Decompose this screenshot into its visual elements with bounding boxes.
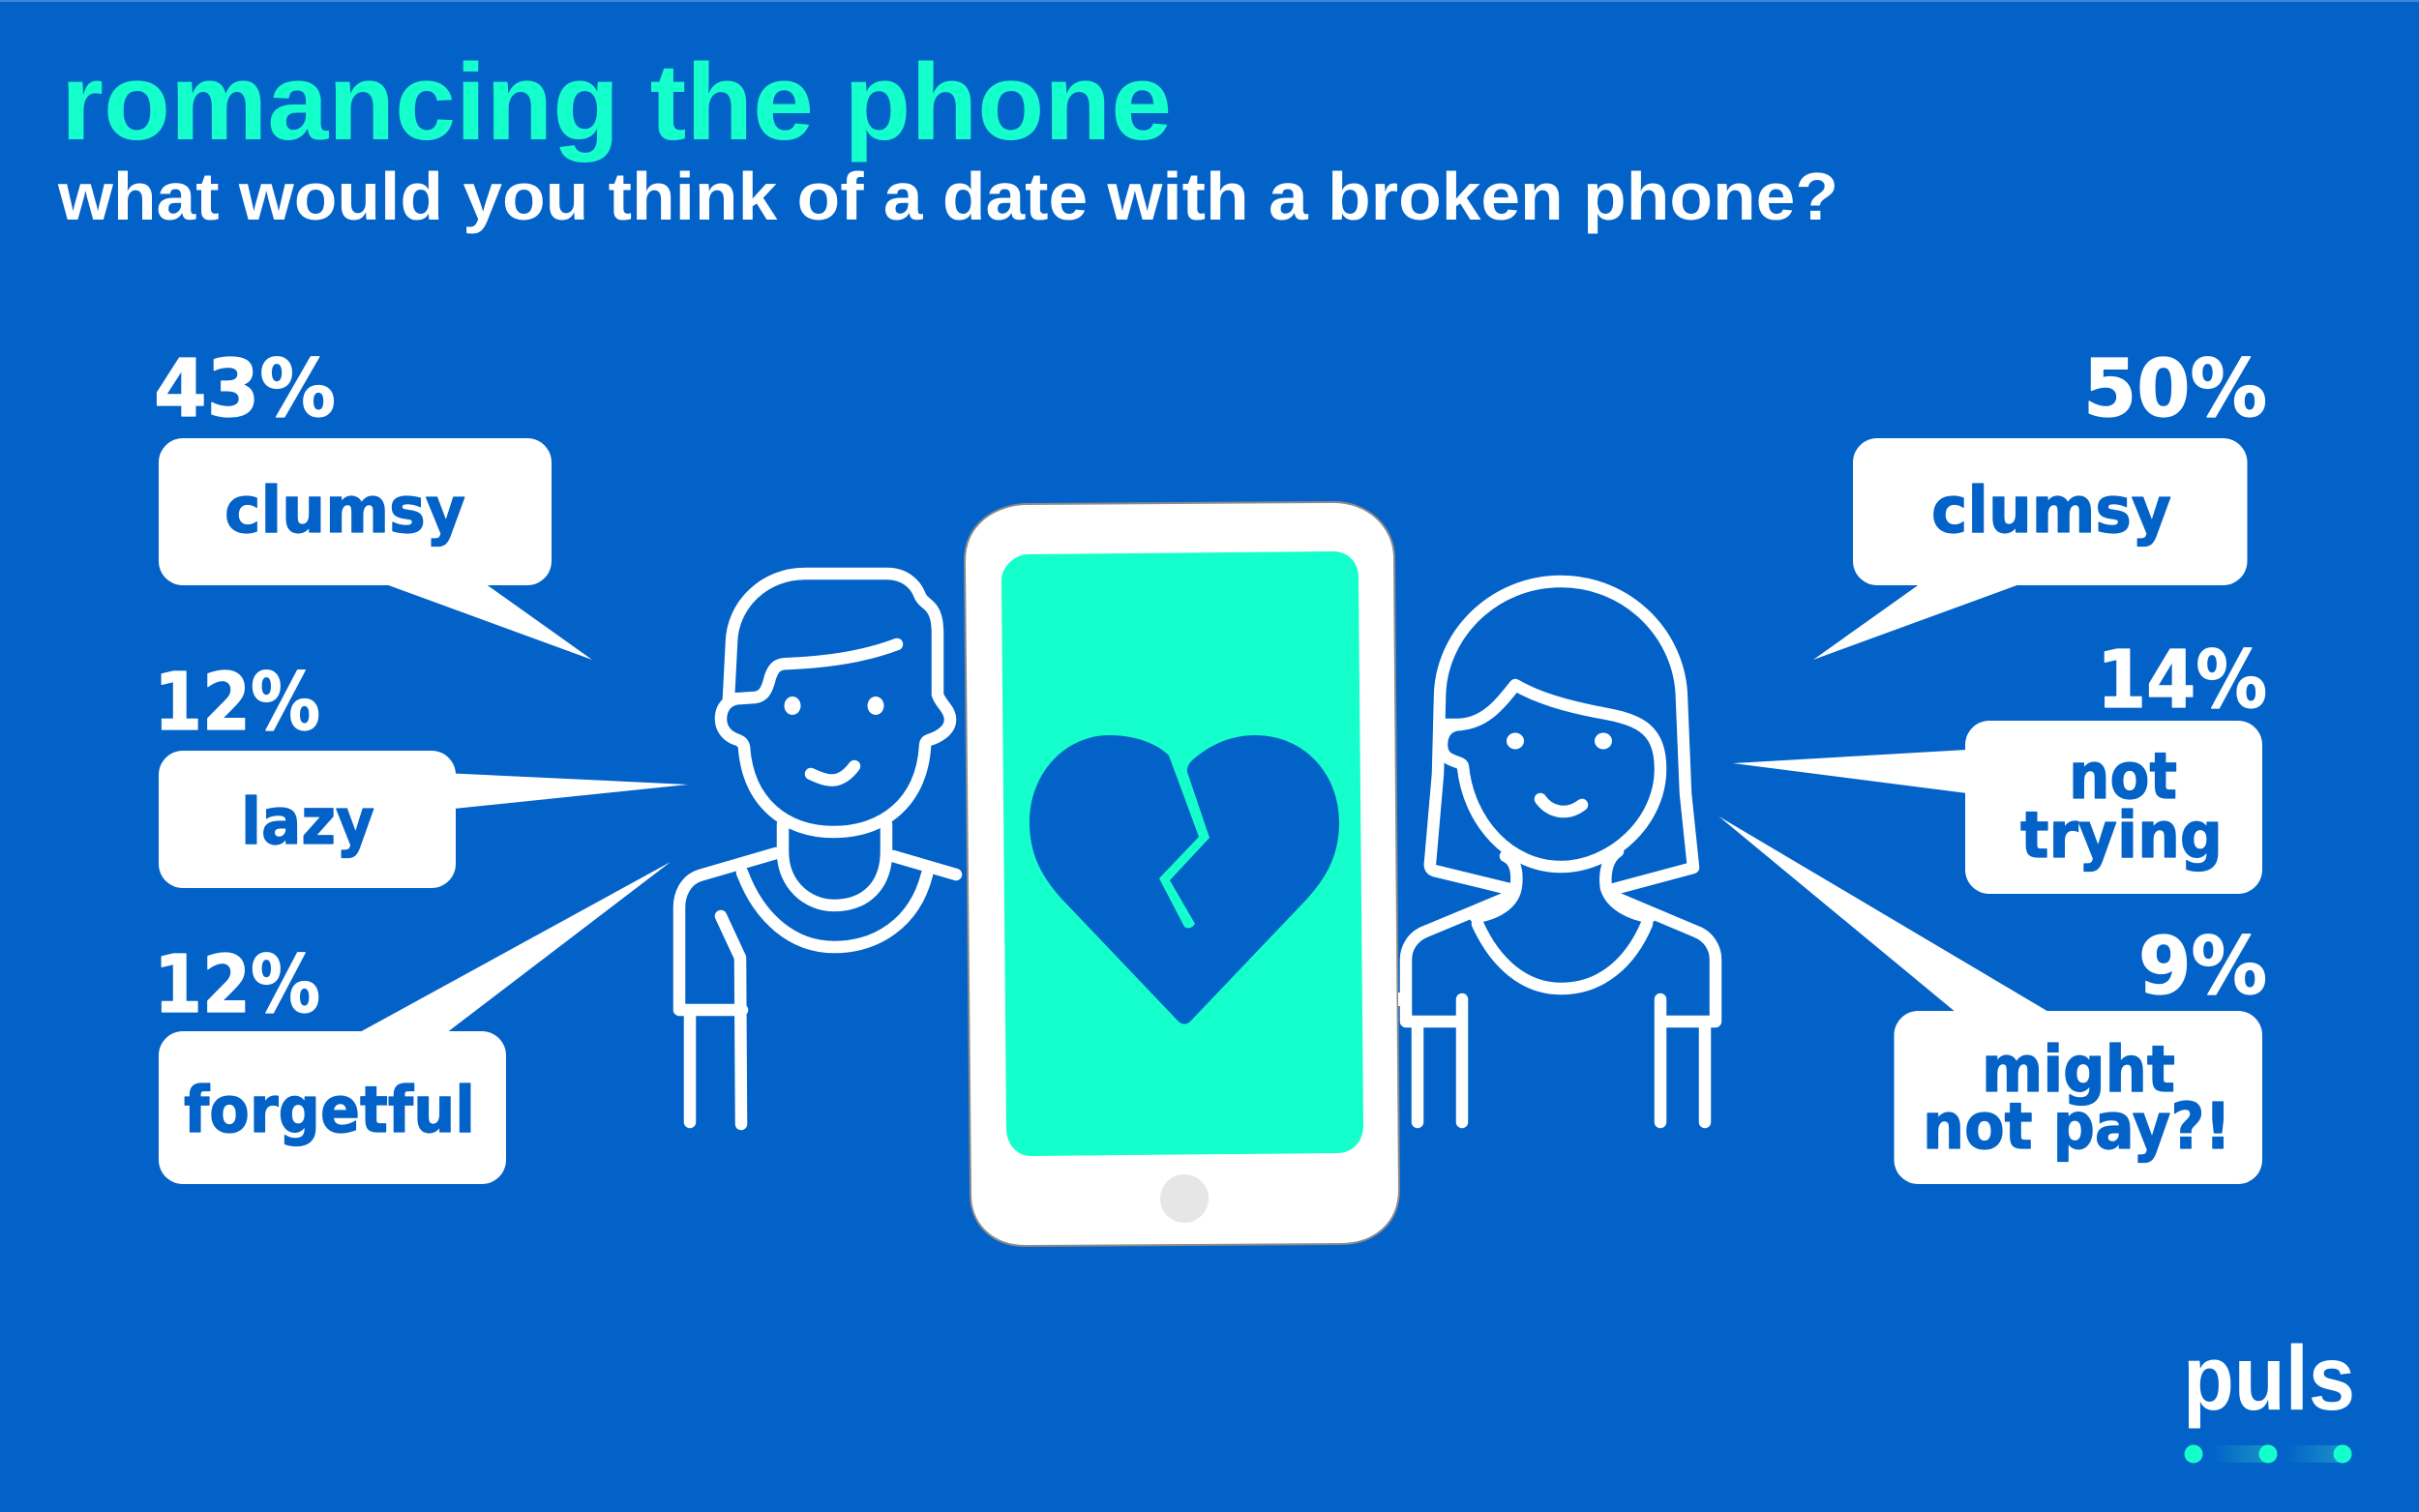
icon: phone with broken heart bbox=[965, 502, 1399, 1246]
speech bubble: might not pay bbox=[1718, 816, 2262, 1184]
speech bubble: lazy bbox=[159, 751, 688, 888]
phone screen bbox=[1001, 551, 1363, 1156]
speech bubble: clumsy: clumsy bbox=[224, 473, 465, 548]
stat: 50%: 50% bbox=[2083, 343, 2267, 435]
speech bubble: clumsy bbox=[159, 438, 592, 660]
panel: left responses (man) bbox=[154, 343, 688, 1184]
panel: right responses (woman) bbox=[1718, 343, 2267, 1184]
stat: 9%: 9% bbox=[2138, 921, 2267, 1013]
phone body bbox=[965, 502, 1399, 1246]
speech bubble: forgetful: forgetful bbox=[184, 1073, 475, 1147]
icon: man bbox=[679, 574, 956, 1124]
speech bubble: not trying: not bbox=[2069, 739, 2177, 814]
speech bubble: clumsy: clumsy bbox=[1931, 473, 2171, 548]
speech bubble: might not pay: might bbox=[1982, 1032, 2175, 1107]
home button bbox=[1160, 1174, 1209, 1223]
speech bubble: might not pay: not pay?! bbox=[1923, 1089, 2231, 1164]
speech bubble: not trying bbox=[1733, 721, 2262, 894]
stat: 43%: 43% bbox=[154, 343, 336, 435]
icon: woman bbox=[1398, 581, 1716, 1122]
logo: puls: puls bbox=[2183, 1327, 2355, 1430]
stat: 12% lazy: 12% bbox=[154, 657, 320, 749]
speech bubble: clumsy bbox=[1813, 438, 2247, 660]
speech bubble: forgetful bbox=[159, 862, 671, 1184]
icon: broken heart bbox=[1030, 735, 1339, 1023]
subtitle: what would you think of a date with a broken phone? bbox=[57, 159, 1838, 234]
speech bubble: not trying: trying bbox=[2020, 798, 2223, 873]
title: romancing the phone bbox=[61, 42, 1172, 163]
stat: 14%: 14% bbox=[2097, 635, 2267, 726]
stat: 12% forgetful: 12% bbox=[154, 939, 320, 1031]
speech bubble: lazy: lazy bbox=[241, 785, 374, 859]
